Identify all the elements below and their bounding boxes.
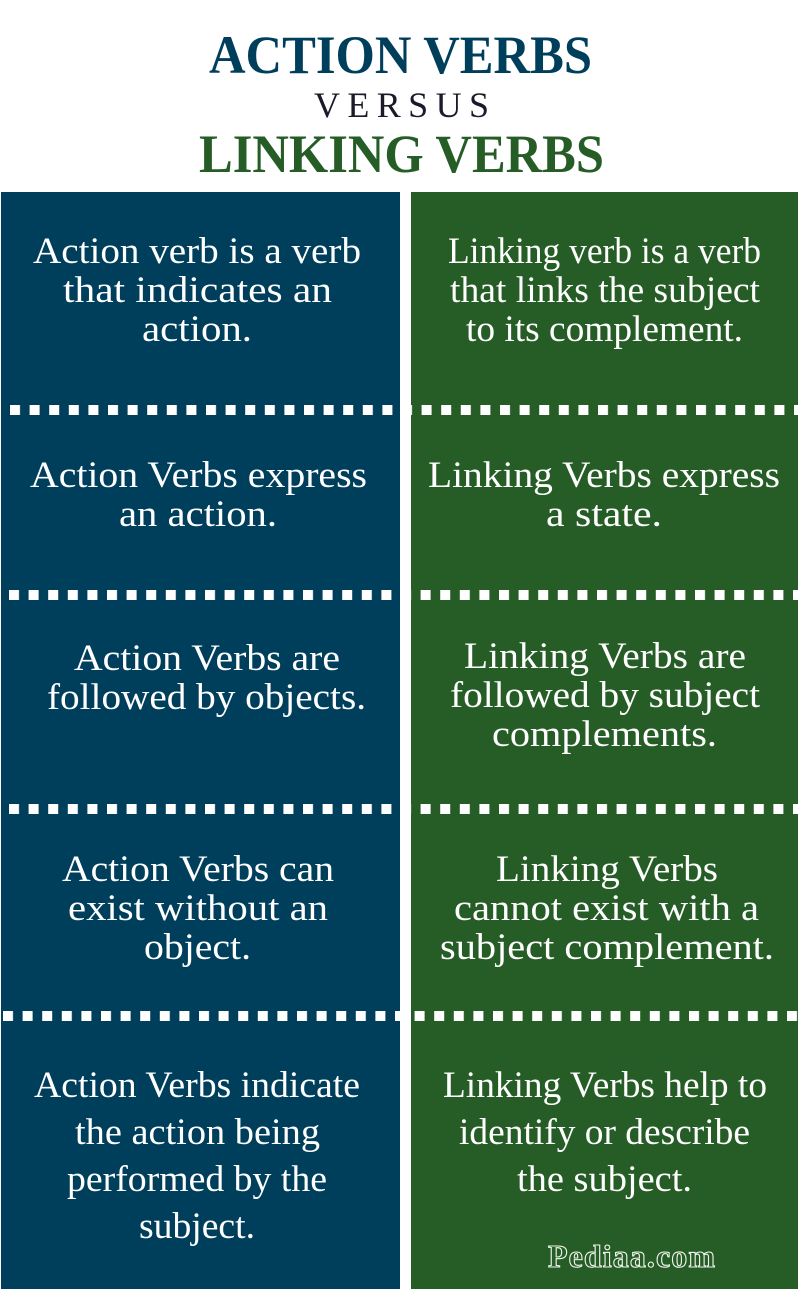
row divider 1 — [10, 405, 798, 415]
text: linking row 4: cannot exist with a — [454, 888, 759, 929]
text: linking row 4: Linking Verbs — [496, 849, 718, 890]
text: linking row 4 — [440, 849, 774, 968]
watermark: Pediaa.com: Pediaa.com — [548, 1238, 715, 1274]
text: action row 5: subject. — [139, 1206, 255, 1247]
text: linking row 2: Linking Verbs express — [428, 455, 780, 496]
text: action row 4 — [62, 849, 334, 968]
text: action row 3: followed by objects. — [47, 677, 366, 718]
text: linking row 5 — [443, 1065, 767, 1200]
text: action row 5: performed by the — [67, 1159, 327, 1200]
text: action row 2 — [30, 455, 367, 535]
row divider 4 — [3, 1011, 798, 1021]
text: linking row 1: to its complement. — [466, 309, 743, 350]
text: linking row 5: the subject. — [517, 1159, 692, 1200]
text: action row 1: that indicates an — [63, 270, 332, 311]
text: action row 4: object. — [144, 927, 251, 968]
text: action row 5: Action Verbs indicate — [34, 1065, 360, 1106]
panel: action verbs column — [1, 192, 400, 1289]
row divider 2 — [9, 590, 798, 600]
text: linking row 3: followed by subject — [450, 675, 761, 716]
text: action row 4: exist without an — [68, 888, 328, 929]
text: linking row 5: identify or describe — [459, 1112, 750, 1153]
text: linking row 1: Linking verb is a verb — [448, 231, 761, 272]
text: action row 2: an action. — [119, 494, 277, 535]
panel: linking verbs column — [411, 192, 798, 1289]
heading: versus: VERSUS — [314, 85, 489, 125]
text: action row 1: Action verb is a verb — [33, 231, 361, 272]
text: action row 5 — [34, 1065, 360, 1247]
text: action row 4: Action Verbs can — [62, 849, 334, 890]
text: linking row 5: Linking Verbs help to — [443, 1065, 767, 1106]
text: action row 3 — [47, 638, 366, 718]
heading: linking verbs: LINKING VERBS — [199, 124, 604, 184]
row divider 3 — [9, 804, 798, 814]
text: action row 3: Action Verbs are — [74, 638, 340, 679]
text: action row 2: Action Verbs express — [30, 455, 367, 496]
text: linking row 3: complements. — [492, 714, 717, 755]
text: linking row 1 — [448, 231, 761, 350]
text: linking row 2: a state. — [546, 494, 662, 535]
heading: action verbs: ACTION VERBS — [209, 25, 592, 85]
text: linking row 1: that links the subject — [450, 270, 761, 311]
text: linking row 2 — [428, 455, 780, 535]
text: linking row 3 — [450, 636, 761, 755]
text: linking row 4: subject complement. — [440, 927, 774, 968]
text: action row 5: the action being — [75, 1112, 320, 1153]
text: linking row 3: Linking Verbs are — [464, 636, 746, 677]
text: action row 1 — [33, 231, 361, 350]
text: action row 1: action. — [142, 309, 252, 350]
title — [199, 25, 604, 184]
